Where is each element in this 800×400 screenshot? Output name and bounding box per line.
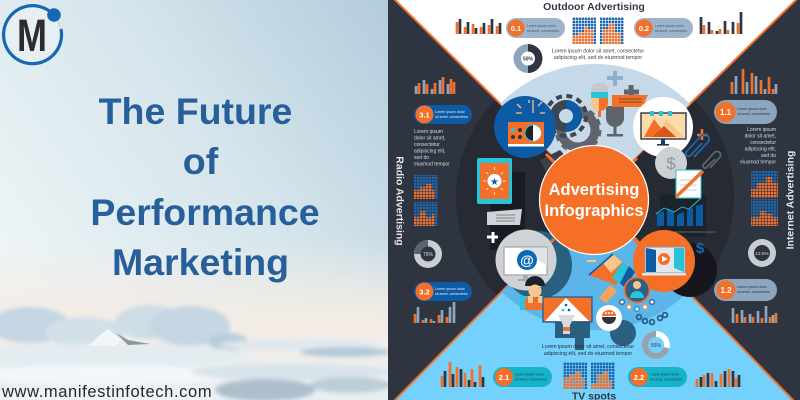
icon: tablet	[477, 158, 512, 204]
text: radio description: Lorem ipsum	[414, 129, 443, 135]
text: outdoor description: Lorem ipsum dolor sit amet, consectetur	[552, 48, 644, 54]
text: radio description: adipiscing elit,	[414, 148, 445, 154]
icon: speech bubble	[487, 209, 522, 225]
pill: 3.1: sit amet, consectetur	[435, 115, 469, 119]
pill: 3.1: Lorem ipsum dolor	[435, 110, 466, 114]
bar chart: radio bottom	[415, 302, 454, 323]
icon: notepad and pencil	[676, 170, 703, 198]
pill: 2.1: 2.1	[499, 373, 509, 382]
icon: orange banner	[612, 95, 648, 107]
bottom sector: tv	[393, 197, 795, 400]
pill: 1.2: Lorem ipsum dolor	[737, 285, 768, 289]
icon: camera circle	[494, 96, 556, 158]
text: outdoor description: adipiscing elit, sed do eiusmod tempor	[554, 55, 642, 61]
text: internet description	[740, 127, 776, 166]
icon: monitor circle	[633, 97, 693, 157]
icon: business person	[520, 276, 551, 310]
title: The Future	[99, 90, 292, 132]
central disc	[500, 64, 690, 330]
icon: dollar sign: $	[696, 240, 705, 257]
text: outdoor description	[552, 48, 644, 61]
donut: 75%	[414, 240, 442, 268]
text: internet description: eiusmod tempor	[740, 160, 776, 166]
text: internet description: dolor sit amet,	[745, 134, 776, 140]
text: tv description: adipiscing elit, sed do eiusmod tempor	[544, 351, 632, 357]
title: Performance	[90, 191, 320, 233]
logo	[4, 6, 62, 64]
centre circle: advertising infographics	[540, 146, 648, 254]
pill: 3.2: sit amet, consectetur	[435, 292, 469, 296]
pill: 2.2: Lorem ipsum dolor	[650, 372, 680, 376]
text: radio description: eiusmod tempor	[414, 162, 450, 168]
icon: snowy mountain peak	[88, 329, 150, 346]
pill: 2.1: Lorem ipsum dolor	[515, 372, 545, 376]
text: radio description	[414, 129, 450, 168]
pill: 2.2: 2.2	[634, 373, 644, 382]
dot grid: tv	[563, 362, 615, 389]
donut: 50%	[514, 44, 542, 73]
text: tv description	[542, 344, 634, 357]
title: Marketing	[112, 241, 289, 283]
title	[90, 90, 320, 283]
pill: 2.1: sit amet, consectetur	[515, 378, 548, 382]
pill: 0.2: sit amet, consectetur	[655, 29, 688, 33]
chart: growth chart	[655, 198, 715, 232]
icon: dollar coin: $	[666, 154, 676, 173]
icon: email monitor circle: @	[520, 252, 534, 268]
icon: email monitor circle	[496, 230, 556, 290]
pill: 0.1: Lorem ipsum dolor	[527, 24, 557, 28]
centre circle: advertising infographics: Infographics	[544, 202, 644, 220]
icon: dollar coin	[655, 147, 687, 179]
icon: speech circle	[596, 305, 622, 331]
bar chart: tv left	[442, 362, 483, 387]
heading: internet advertising: Internet Advertising	[784, 151, 796, 249]
pill: 3.2: Lorem ipsum dolor	[435, 287, 466, 291]
bar chart: tv right	[697, 369, 739, 387]
pill: 1.2	[714, 279, 777, 301]
pill: 1.2: 1.2	[720, 286, 732, 295]
donut: 75%: 75%	[423, 252, 434, 258]
pill: 3.1	[414, 105, 472, 124]
bar chart: internet top	[732, 69, 776, 94]
panel: sky and clouds background	[0, 0, 390, 400]
pill: 2.2: sit amet, consectetur	[650, 378, 683, 382]
pill: 3.1: 3.1	[419, 110, 430, 120]
pill: 0.2	[634, 18, 693, 38]
panel: advertising infographic	[388, 0, 800, 400]
pill: 3.2: 3.2	[419, 288, 430, 296]
icon: tablet: ★	[490, 177, 499, 188]
centre circle: advertising infographics: Advertising	[549, 181, 639, 199]
text: radio description: dolor sit amet,	[414, 136, 445, 142]
icon: plus signs	[487, 71, 708, 243]
pill: 2.1	[493, 367, 552, 387]
bar chart: internet bottom	[733, 306, 776, 323]
icon: microphones	[591, 83, 624, 136]
logo: M	[17, 10, 47, 61]
icon: paper clips	[686, 134, 721, 168]
icon: gray gear	[557, 109, 599, 151]
heading: outdoor advertising: Outdoor Advertising	[543, 1, 645, 13]
donut: 55%	[642, 331, 670, 359]
icon: megaphone	[587, 254, 635, 303]
pill: 2.2	[628, 367, 687, 387]
dot grid: outdoor	[572, 17, 624, 44]
icon: funnel panel	[543, 297, 592, 334]
bar chart: outdoor left	[457, 19, 500, 34]
pill: 1.1	[714, 100, 777, 124]
bar chart: outdoor right	[701, 12, 741, 34]
text: radio description: sed do	[414, 155, 429, 161]
icon: blue gear	[546, 96, 586, 136]
text: radio description: consectetur	[414, 142, 440, 148]
pill: 1.1: Lorem ipsum dolor	[737, 107, 768, 111]
text: tv description: Lorem ipsum dolor sit amet, consectetur	[542, 344, 634, 350]
text: internet description: consectetur	[750, 140, 776, 146]
text: internet description: sed do	[761, 153, 776, 159]
icon: video laptop circle	[633, 230, 695, 292]
donut: 12.5%: 12.5%	[755, 251, 770, 257]
donut: 50%: 50%	[523, 56, 534, 62]
pill: 1.2: sit amet, consectetur	[737, 290, 771, 294]
text: internet description: adipiscing elit,	[745, 146, 776, 152]
top sector: outdoor	[393, 0, 798, 197]
title: of	[183, 140, 219, 182]
dot grid: internet	[751, 171, 778, 226]
donut: 12.5%	[748, 239, 776, 267]
pill: 3.2	[414, 282, 472, 301]
pill: 0.2: 0.2	[639, 24, 649, 33]
decorative shadows	[490, 150, 717, 350]
donut: 55%: 55%	[651, 343, 662, 349]
pill: 1.1: sit amet, consectetur	[737, 112, 771, 116]
bar chart: radio top	[416, 77, 454, 94]
icon: person avatar with network	[620, 278, 667, 324]
pill: 0.1: 0.1	[511, 24, 521, 33]
pill: 0.1: sit amet, consectetur	[527, 29, 560, 33]
dot grid: radio	[414, 175, 438, 226]
pill: 1.1: 1.1	[720, 108, 732, 117]
pill: 0.2: Lorem ipsum dolor	[655, 24, 685, 28]
pill: 0.1	[506, 18, 565, 38]
heading: radio advertising: Radio Advertising	[394, 156, 406, 246]
text: internet description: Lorem ipsum	[747, 127, 776, 133]
